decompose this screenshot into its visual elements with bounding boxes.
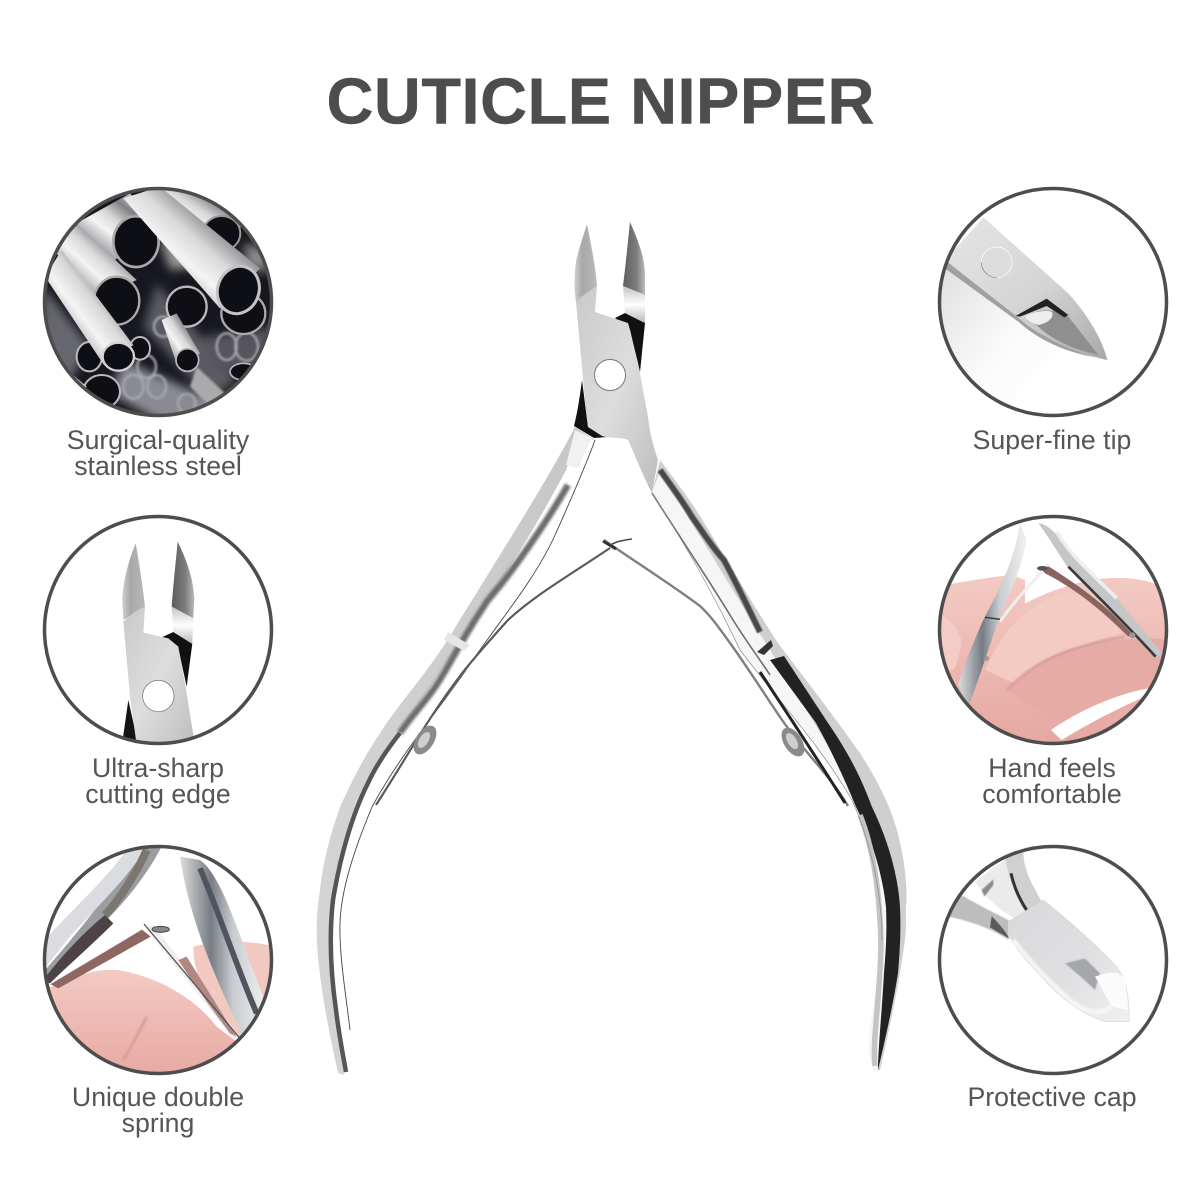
panel: unique double spring [37,843,277,1138]
tube upper centre [73,193,159,267]
caption: Super-fine tip [973,425,1131,455]
lower-left rings [77,337,150,408]
hand [935,575,1172,750]
left handle [317,427,595,1076]
caption: Ultra-sharp [92,753,224,783]
photo: spring between fingers [46,848,270,1074]
right handle [1038,523,1162,658]
caption: Hand feels [988,753,1116,783]
caption: stainless steel [74,451,242,481]
main product: cuticle nipper [317,222,907,1076]
panel: ultra-sharp cutting edge [44,516,272,809]
front left tube [45,250,134,371]
white strip [1051,688,1148,740]
left rivet [409,722,441,758]
right jaw lower facet [623,286,645,323]
tube far right [164,190,242,248]
spring eye [152,926,169,932]
circle frame [940,516,1166,744]
dark pivot shadows [574,313,645,438]
right rivet [777,724,809,760]
caption: Unique double [72,1082,244,1112]
caption: spring [122,1108,194,1138]
front finger [50,970,236,1074]
left spring [1000,564,1049,622]
pivot plate [576,286,658,493]
circle frame [940,846,1166,1074]
caption: comfortable [982,779,1122,809]
left jaw chip [585,290,596,297]
back finger [193,942,270,1036]
small ring centre [167,287,207,327]
photo: jaw close-up [122,542,195,745]
pivot hole [594,360,626,390]
photo: steel tubes [46,190,270,414]
photo: silicone cap on tip [948,850,1129,1022]
caption: Surgical-quality [67,425,250,455]
large tube front [123,187,266,320]
tube left middle [53,223,139,325]
title: CUTICLE NIPPER [326,64,874,138]
circle frame [44,846,272,1074]
photo: tip close-up [941,218,1108,372]
left jaw [574,224,597,302]
left handle [958,523,1027,707]
caption: Protective cap [967,1082,1137,1112]
circle frame [44,516,272,744]
ring right back [221,293,265,334]
caption: cutting edge [85,779,231,809]
left spring [50,929,151,988]
panel: hand feels comfortable [935,516,1172,809]
panel: super-fine tip [935,188,1166,455]
right handle [180,857,268,1037]
photo: nipper held in hand [935,523,1172,750]
double spring [376,539,848,806]
left handle [46,848,161,975]
right spring [145,925,240,1040]
right spring [1040,567,1132,637]
panel: protective cap [940,846,1166,1112]
panel: surgical-quality stainless steel [42,186,274,476]
right handle [652,460,907,1071]
right jaw upper blade [623,222,645,295]
circle frame [940,188,1166,416]
centre small tube [162,313,200,371]
circle frame [44,188,272,416]
